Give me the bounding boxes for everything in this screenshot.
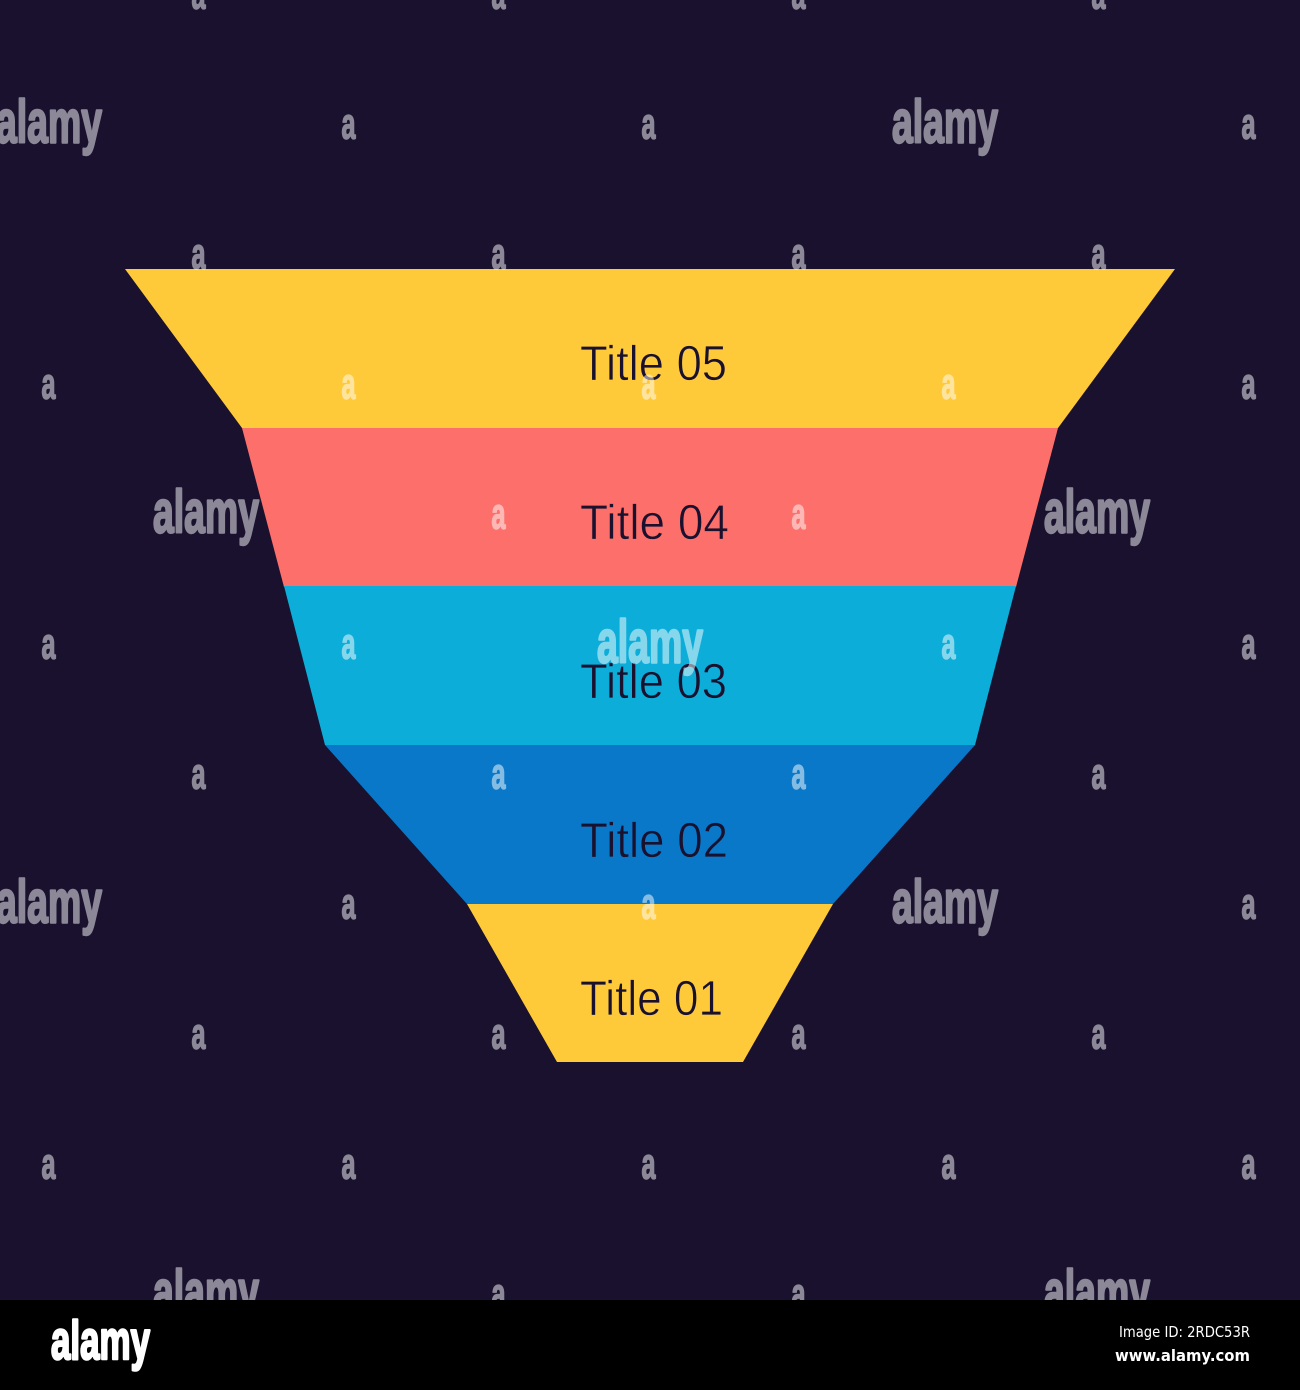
website: www.alamy.com — [1115, 1346, 1250, 1365]
footer logo: alamy — [51, 1309, 150, 1371]
watermark pattern: alamy — [153, 478, 259, 545]
watermark pattern: a — [792, 229, 806, 278]
watermark pattern: a — [192, 749, 206, 798]
watermark pattern: a — [792, 489, 806, 538]
watermark pattern: alamy — [1044, 1258, 1150, 1325]
funnel tier: Title 04 — [242, 428, 1058, 587]
footer bar — [0, 1300, 1300, 1390]
funnel tier: Title 01: Title 01 — [580, 972, 723, 1026]
watermark pattern: a — [492, 1269, 506, 1318]
watermark pattern: a — [492, 489, 506, 538]
watermark pattern: a — [942, 619, 956, 668]
watermark pattern: a — [342, 879, 356, 928]
watermark pattern: a — [642, 359, 656, 408]
watermark pattern: a — [1092, 749, 1106, 798]
funnel tier: Title 03 — [284, 586, 1016, 745]
watermark pattern: a — [1242, 619, 1256, 668]
funnel tier: Title 05 — [125, 269, 1175, 428]
watermark pattern: a — [1242, 879, 1256, 928]
watermark pattern: a — [1092, 1009, 1106, 1058]
watermark pattern: a — [792, 1009, 806, 1058]
watermark pattern: alamy — [0, 88, 102, 155]
watermark pattern: a — [492, 229, 506, 278]
watermark pattern: a — [1242, 99, 1256, 148]
watermark pattern: alamy — [153, 1258, 259, 1325]
watermark pattern: a — [42, 1139, 56, 1188]
watermark pattern: a — [642, 879, 656, 928]
watermark pattern: a — [42, 359, 56, 408]
watermark pattern: a — [792, 749, 806, 798]
watermark pattern: a — [342, 619, 356, 668]
watermark pattern: a — [1092, 229, 1106, 278]
watermark pattern: a — [1242, 359, 1256, 408]
watermark pattern: a — [342, 99, 356, 148]
watermark pattern: a — [792, 1269, 806, 1318]
watermark pattern: a — [192, 1009, 206, 1058]
funnel tier: Title 05: Title 05 — [580, 337, 727, 391]
watermark pattern: alamy — [892, 88, 998, 155]
funnel chart — [125, 269, 1175, 1062]
watermark pattern: a — [492, 1009, 506, 1058]
funnel tier: Title 01 — [467, 904, 833, 1062]
watermark pattern: alamy — [0, 868, 102, 935]
funnel tier: Title 03: Title 03 — [580, 655, 727, 709]
watermark pattern: alamy — [892, 868, 998, 935]
watermark pattern: a — [342, 359, 356, 408]
watermark pattern: a — [192, 229, 206, 278]
watermark pattern: a — [492, 749, 506, 798]
funnel tier: Title 02: Title 02 — [580, 814, 728, 868]
watermark pattern: a — [642, 1139, 656, 1188]
watermark pattern: a — [342, 1139, 356, 1188]
watermark pattern: alamy — [1044, 478, 1150, 545]
watermark pattern: a — [642, 99, 656, 148]
watermark pattern: alamy — [597, 608, 703, 675]
funnel tier: Title 02 — [325, 745, 975, 904]
watermark pattern: a — [942, 1139, 956, 1188]
watermark pattern: a — [42, 619, 56, 668]
funnel tier: Title 04: Title 04 — [580, 496, 729, 550]
watermark pattern: a — [942, 359, 956, 408]
image id: Image ID: 2RDC53R — [1119, 1323, 1250, 1341]
watermark pattern: a — [1242, 1139, 1256, 1188]
